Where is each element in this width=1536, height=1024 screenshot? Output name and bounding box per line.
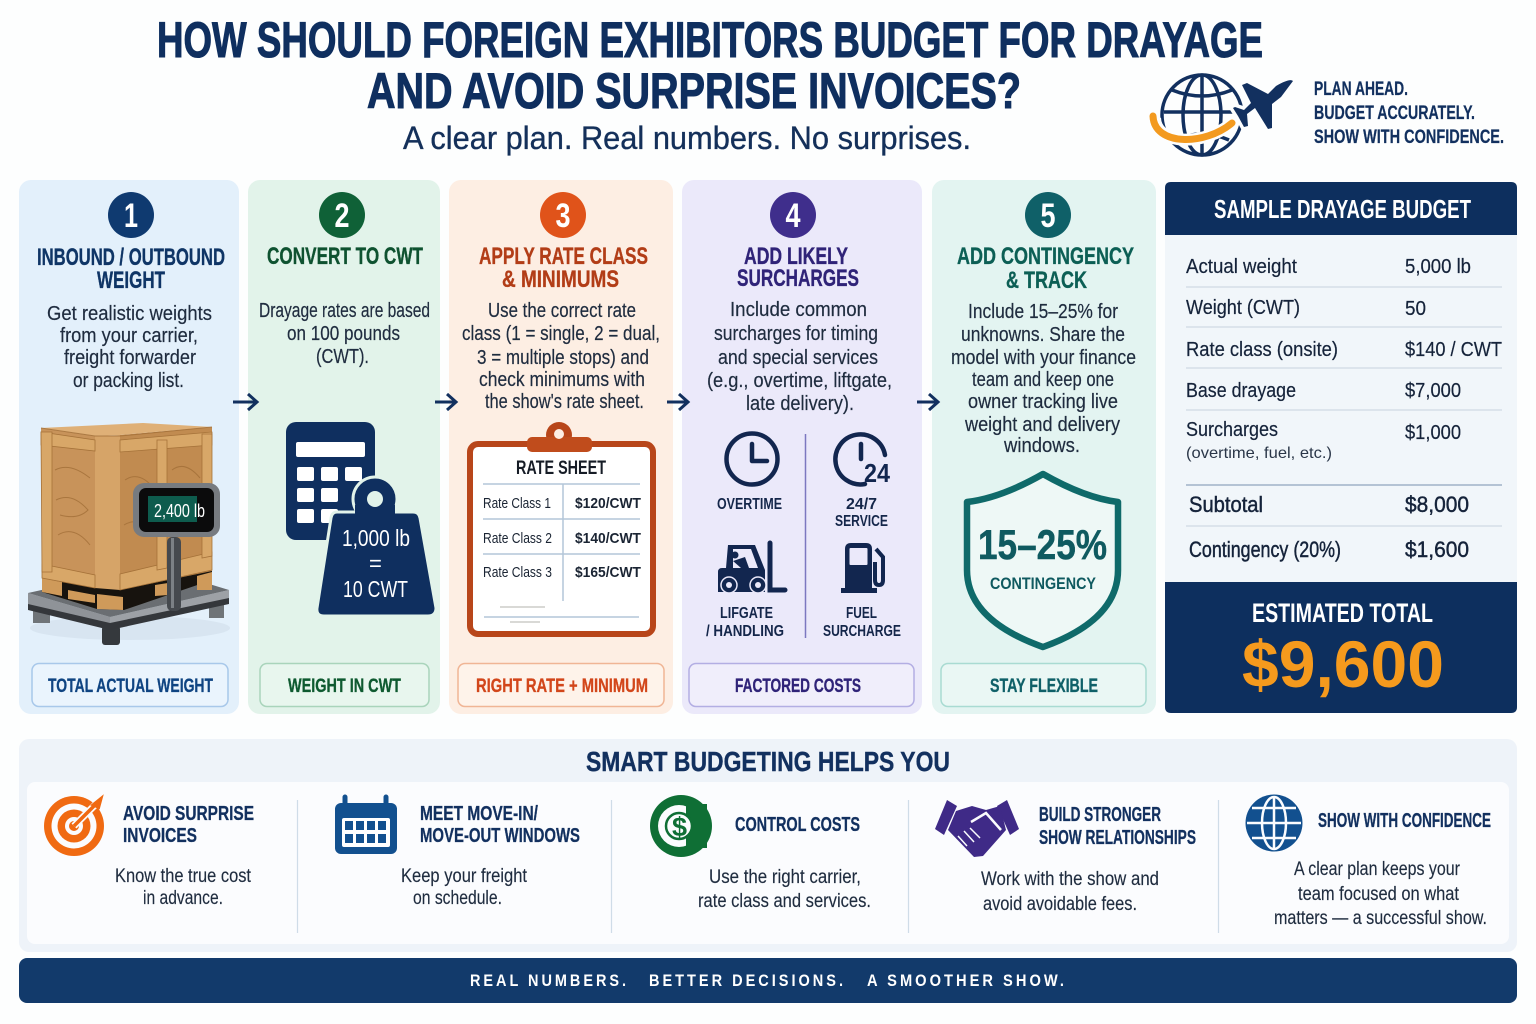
icon: globe <box>1246 794 1302 852</box>
description: Use the correct rate <box>488 300 636 322</box>
arrow 4 <box>917 394 938 410</box>
heading: ADD CONTINGENCY <box>957 243 1134 270</box>
budget rows: $140 / CWT <box>1405 339 1502 361</box>
description: unknowns. Share the <box>961 324 1125 346</box>
rate sheet clipboard: Rate Class 2 <box>483 530 552 547</box>
budget rows: Weight (CWT) <box>1186 297 1300 319</box>
description: surcharges for timing <box>714 323 878 345</box>
heading: APPLY RATE CLASS <box>479 243 648 270</box>
benefit: show with confidence: team focused on what <box>1298 884 1460 905</box>
heading: CONVERT TO CWT <box>267 243 423 270</box>
icon: weight 1000 lb equals 10 cwt: = <box>369 551 382 576</box>
icon: weight 1000 lb equals 10 cwt: 10 CWT <box>343 576 408 602</box>
budget rows: $1,600 <box>1405 537 1469 562</box>
heading <box>37 244 225 294</box>
panel: step 2 convert to cwt <box>248 180 440 714</box>
icon: 24/7 service <box>835 434 890 530</box>
icon: forklift liftgate handling: / HANDLING <box>706 623 784 640</box>
shield 15-25% contingency <box>967 474 1118 647</box>
title: AND AVOID SURPRISE INVOICES? <box>367 63 1021 119</box>
description: or packing list. <box>73 370 184 392</box>
step number 1 <box>108 192 154 238</box>
description: (CWT). <box>316 346 369 368</box>
benefit: meet move-in move-out windows: MOVE-OUT WINDOWS <box>420 825 580 847</box>
icon: overtime clock <box>717 434 782 513</box>
step number 3 <box>540 192 586 238</box>
rate sheet clipboard <box>470 422 653 634</box>
tagline <box>1314 79 1504 148</box>
icon: crate on scale: 2,400 lb <box>154 501 205 521</box>
panel: step 4 surcharges <box>682 180 922 714</box>
arrow 1 <box>233 394 257 410</box>
heading <box>957 243 1134 294</box>
benefit: control costs <box>650 795 871 912</box>
rate sheet clipboard: $140/CWT <box>575 530 641 547</box>
benefit: meet move-in move-out windows: Keep your freight <box>401 866 528 887</box>
description <box>259 300 430 368</box>
benefit: build stronger show relationships: avoid avoidable fees. <box>983 894 1137 915</box>
description: weight and delivery <box>964 414 1120 436</box>
budget rows: (overtime, fuel, etc.) <box>1186 445 1332 462</box>
icon: forklift liftgate handling: LIFGATE <box>720 605 773 622</box>
footer banner: A SMOOTHER SHOW. <box>867 971 1067 990</box>
benefit: show with confidence <box>1246 794 1491 929</box>
label: total actual weight <box>32 664 228 706</box>
benefit: avoid surprise invoices: Know the true cost <box>115 866 252 887</box>
arrow 3 <box>667 394 688 410</box>
icon: fuel pump: SURCHARGE <box>823 623 901 640</box>
description: check minimums with <box>479 369 645 391</box>
step number 4 <box>770 192 816 238</box>
arrow 2 <box>435 394 456 410</box>
description: and special services <box>718 347 878 369</box>
subtitle: A clear plan. Real numbers. No surprises. <box>403 120 971 156</box>
heading: INBOUND / OUTBOUND <box>37 244 225 271</box>
label: right rate plus minimum <box>458 664 664 706</box>
rate sheet clipboard: RATE SHEET <box>516 458 606 479</box>
panel: step 3 apply rate class <box>449 180 673 714</box>
panel: sample drayage budget <box>1165 182 1517 713</box>
budget rows: Actual weight <box>1186 256 1297 278</box>
step number 2 <box>319 192 365 238</box>
icon: weight 1000 lb equals 10 cwt <box>317 477 436 616</box>
label: right rate plus minimum: RIGHT RATE + MINIMUM <box>476 675 648 697</box>
icon: forklift liftgate handling <box>706 543 785 640</box>
budget rows: Contingency (20%) <box>1189 537 1341 562</box>
budget rows: $7,000 <box>1405 380 1461 402</box>
step number 5 <box>1025 192 1071 238</box>
heading: & MINIMUMS <box>502 266 619 293</box>
description: on 100 pounds <box>287 323 400 345</box>
icon: crate on scale <box>28 423 230 645</box>
benefit: build stronger show relationships: SHOW RELATIONSHIPS <box>1039 827 1196 849</box>
icon: fuel pump <box>823 543 901 640</box>
description: Drayage rates are based <box>259 300 430 322</box>
icon: fuel pump: FUEL <box>846 605 877 622</box>
estimated total <box>1165 582 1517 713</box>
benefit: avoid surprise invoices <box>44 796 254 909</box>
description: Include common <box>730 299 867 321</box>
icon: target <box>44 796 104 856</box>
icon: globe and plane <box>1153 75 1293 155</box>
benefit: meet move-in move-out windows <box>335 797 580 909</box>
budget header <box>1165 182 1517 235</box>
heading: WEIGHT <box>97 267 165 294</box>
footer banner <box>19 958 1517 1003</box>
description: from your carrier, <box>60 325 198 347</box>
budget rows: $8,000 <box>1405 492 1469 517</box>
description: team and keep one <box>972 369 1114 391</box>
description: owner tracking live <box>968 391 1118 413</box>
step number 3: 3 <box>556 197 570 235</box>
step number 4: 4 <box>786 197 801 235</box>
step number 2: 2 <box>334 197 350 235</box>
benefit: meet move-in move-out windows: MEET MOVE-IN/ <box>420 803 538 825</box>
budget rows: Base drayage <box>1186 380 1296 402</box>
icon: 24/7 service: SERVICE <box>835 513 888 530</box>
benefit: build stronger show relationships <box>935 800 1196 915</box>
description: model with your finance <box>951 347 1136 369</box>
icon: 24/7 service: 24/7 <box>846 496 877 513</box>
icon: dollar coin <box>650 795 712 857</box>
label: weight in cwt <box>260 664 429 706</box>
rate sheet clipboard: $165/CWT <box>575 564 641 581</box>
label: stay flexible: STAY FLEXIBLE <box>990 675 1098 697</box>
icon: calendar <box>335 797 397 854</box>
shield 15-25% contingency: 15–25% <box>978 521 1107 568</box>
icon: 24/7 service: 24 <box>864 458 890 488</box>
panel: step 5 contingency <box>932 180 1156 714</box>
icon: overtime clock: OVERTIME <box>717 496 782 513</box>
title <box>157 12 1263 119</box>
benefit: control costs: rate class and services. <box>698 891 871 912</box>
description <box>462 300 660 413</box>
heading: ADD LIKELY <box>744 243 848 270</box>
tagline: PLAN AHEAD. <box>1314 79 1408 100</box>
description: Get realistic weights <box>47 303 212 325</box>
estimated total: ESTIMATED TOTAL <box>1252 598 1433 628</box>
budget rows: Surcharges <box>1186 419 1278 441</box>
heading: SURCHARGES <box>737 265 859 292</box>
benefit: control costs: CONTROL COSTS <box>735 814 860 836</box>
description: (e.g., overtime, liftgate, <box>707 370 892 392</box>
budget rows: Subtotal <box>1189 492 1263 517</box>
panel: step 1 inbound outbound weight <box>19 180 239 714</box>
label: factored costs <box>689 664 914 706</box>
description: Include 15–25% for <box>968 301 1118 323</box>
step number 5: 5 <box>1040 197 1056 235</box>
heading <box>737 243 859 292</box>
benefit: avoid surprise invoices: in advance. <box>143 888 223 909</box>
description: freight forwarder <box>64 347 196 369</box>
description: 3 = multiple stops) and <box>477 347 649 369</box>
description: windows. <box>1003 435 1080 457</box>
benefit: build stronger show relationships: BUILD STRONGER <box>1039 804 1161 826</box>
panel: smart budgeting helps you <box>19 739 1517 952</box>
label: weight in cwt: WEIGHT IN CWT <box>288 675 401 697</box>
heading <box>479 243 648 293</box>
description: the show's rate sheet. <box>485 391 644 413</box>
icon: dollar coin: $ <box>672 812 687 842</box>
icon: handshake <box>935 800 1019 857</box>
divider line <box>804 434 806 638</box>
label: total actual weight: TOTAL ACTUAL WEIGHT <box>48 675 213 697</box>
step number 1: 1 <box>124 197 138 235</box>
budget rows: Rate class (onsite) <box>1186 339 1338 361</box>
icon: weight 1000 lb equals 10 cwt: 1,000 lb <box>342 525 410 551</box>
budget rows: 5,000 lb <box>1405 256 1471 278</box>
benefit: show with confidence: matters — a successful show. <box>1274 908 1487 929</box>
description: class (1 = single, 2 = dual, <box>462 323 660 345</box>
benefit: avoid surprise invoices: AVOID SURPRISE <box>123 803 254 825</box>
benefit: avoid surprise invoices: INVOICES <box>123 825 197 847</box>
heading: & TRACK <box>1006 267 1087 294</box>
description: late delivery). <box>746 393 854 415</box>
benefit: show with confidence: A clear plan keeps your <box>1294 859 1461 880</box>
description <box>47 303 212 392</box>
benefit: meet move-in move-out windows: on schedule. <box>413 888 502 909</box>
label: stay flexible <box>941 664 1146 706</box>
rate sheet clipboard: Rate Class 3 <box>483 564 552 581</box>
rate sheet clipboard: $120/CWT <box>575 495 641 512</box>
budget rows: 50 <box>1405 298 1426 320</box>
label: factored costs: FACTORED COSTS <box>735 675 861 697</box>
footer banner: BETTER DECISIONS. <box>649 971 846 990</box>
footer banner: REAL NUMBERS. <box>470 971 629 990</box>
description <box>707 299 892 415</box>
tagline: BUDGET ACCURATELY. <box>1314 103 1475 124</box>
estimated total: $9,600 <box>1242 627 1444 701</box>
description <box>951 301 1136 457</box>
section heading: SMART BUDGETING HELPS YOU <box>586 746 950 777</box>
budget rows: $1,000 <box>1405 422 1461 444</box>
shield 15-25% contingency: CONTINGENCY <box>990 574 1097 593</box>
benefit: control costs: Use the right carrier, <box>709 867 861 888</box>
icon: calculator <box>286 422 375 540</box>
budget rows <box>1186 256 1502 562</box>
rate sheet clipboard: Rate Class 1 <box>483 495 551 512</box>
benefit: build stronger show relationships: Work with the show and <box>981 869 1159 890</box>
